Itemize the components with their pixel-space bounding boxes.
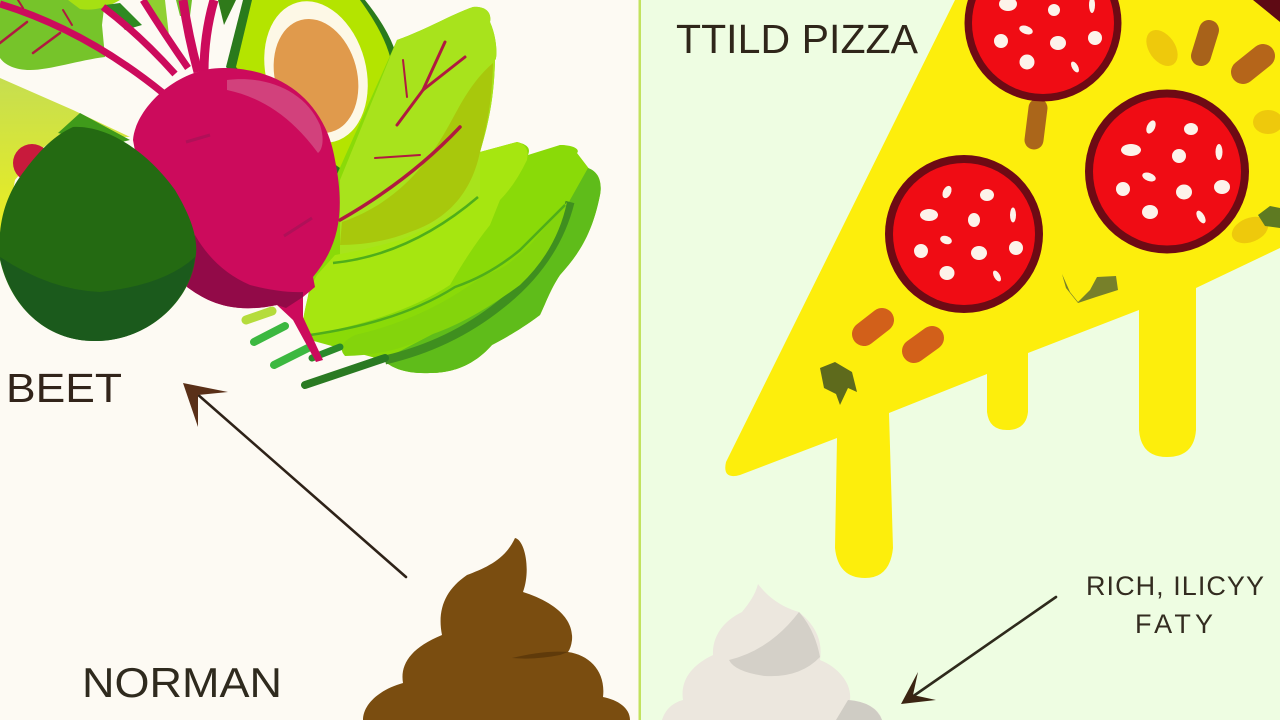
- icon: left light leaf: [0, 78, 130, 260]
- icon: brown stool: [363, 538, 630, 720]
- crust corner: [1253, 0, 1280, 22]
- pepperoni left: [885, 155, 1043, 313]
- label: rich fatty: FATY: [1135, 609, 1213, 639]
- panel: right background: [640, 0, 1280, 720]
- icon: leaf veins: [0, 0, 465, 220]
- icon: pizza slice: [725, 0, 1280, 578]
- icon: lettuce leaves: [303, 7, 601, 373]
- outer leaf: [383, 168, 601, 373]
- dark leaf band: [385, 202, 570, 360]
- icon: beet stems: [0, 0, 214, 93]
- panel: left background: [0, 0, 640, 720]
- pepperoni top: [964, 0, 1122, 102]
- toppings: sausage pieces: [864, 30, 1263, 351]
- icon: vegetables group: [0, 0, 601, 385]
- arrow: normal to beet: [183, 383, 406, 577]
- upper leaf: [340, 7, 500, 290]
- icon: red bulb at left: [13, 144, 51, 182]
- leaf shading: [340, 63, 493, 245]
- lettuce base silhouette: [303, 7, 601, 373]
- icon: dark green fruit: [0, 113, 196, 341]
- icon: pale fatty stool: [662, 584, 882, 720]
- label: beet: BEET: [6, 365, 122, 411]
- label: rich fatty: RICH, ILICYY: [1086, 571, 1264, 601]
- front leaf: [303, 142, 528, 335]
- middle leaf: [457, 145, 577, 276]
- lower middle leaf: [342, 202, 567, 356]
- label: normal: NORMAN: [82, 659, 282, 706]
- icon: avocado: [226, 0, 401, 178]
- leaf creases: [310, 197, 565, 335]
- pepperoni right: [1085, 90, 1249, 254]
- arrow: rich fatty to stool: [901, 597, 1056, 704]
- toppings: herbs: [820, 206, 1280, 405]
- icon: beet root: [133, 68, 340, 362]
- label: title pizza: TTILD PIZZA: [676, 16, 919, 62]
- icon: back left leaf: [0, 0, 236, 70]
- label: rich fatty: [1086, 571, 1264, 639]
- toppings: pale pieces: [1140, 24, 1280, 248]
- pizza body and drips: [725, 0, 1280, 578]
- icon: small stems: [246, 311, 385, 385]
